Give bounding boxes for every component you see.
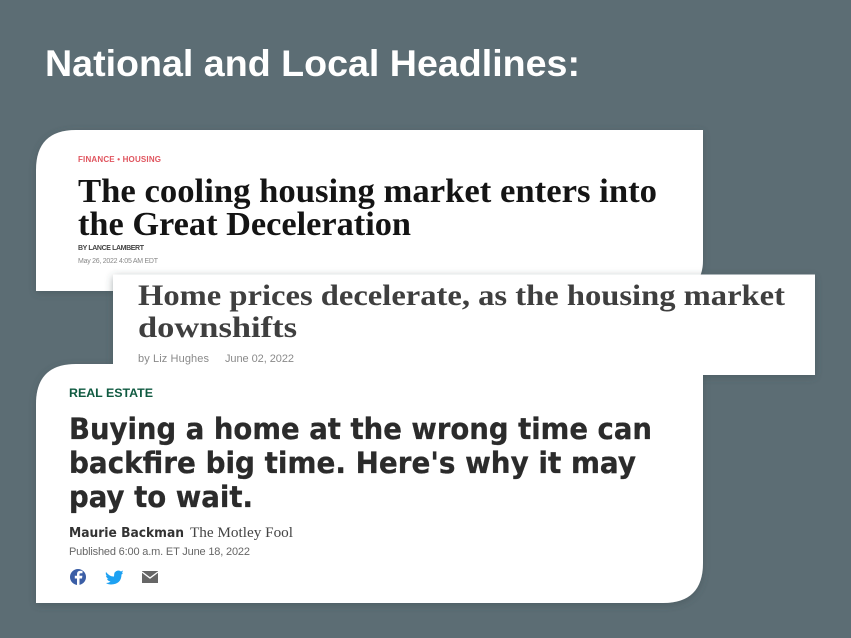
icon: twitter (106, 570, 123, 584)
date: May 26, 2022 4:05 AM EDT (78, 258, 159, 265)
headline: backfire big time. Here's why it may (69, 446, 636, 480)
panel: Finance headline card (36, 130, 703, 291)
byline: BY LANCE LAMBERT (78, 245, 145, 252)
headline: downshifts (138, 311, 297, 344)
byline and date (138, 353, 294, 365)
section label: FINANCE • HOUSING (78, 155, 161, 164)
headline: pay to wait. (69, 480, 253, 514)
panel: Home prices headline card (113, 274, 815, 375)
icon: facebook (70, 569, 86, 585)
headline (138, 279, 785, 344)
headline: The cooling housing market enters into (78, 173, 657, 210)
byline and date: by Liz Hughes (138, 353, 210, 365)
source: The Motley Fool (190, 525, 293, 541)
section label: REAL ESTATE (69, 386, 153, 400)
author: Maurie Backman (69, 526, 184, 541)
icon: email (142, 571, 158, 583)
headline: Home prices decelerate, as the housing market (138, 279, 785, 312)
published date: Published 6:00 a.m. ET June 18, 2022 (69, 546, 250, 558)
headline (69, 412, 652, 514)
headline: Buying a home at the wrong time can (69, 412, 652, 446)
headline (78, 173, 657, 243)
title: National and Local Headlines: (45, 43, 580, 84)
byline and date: June 02, 2022 (225, 353, 294, 365)
panel: Real estate headline card (36, 364, 703, 603)
headline: the Great Deceleration (78, 206, 411, 243)
